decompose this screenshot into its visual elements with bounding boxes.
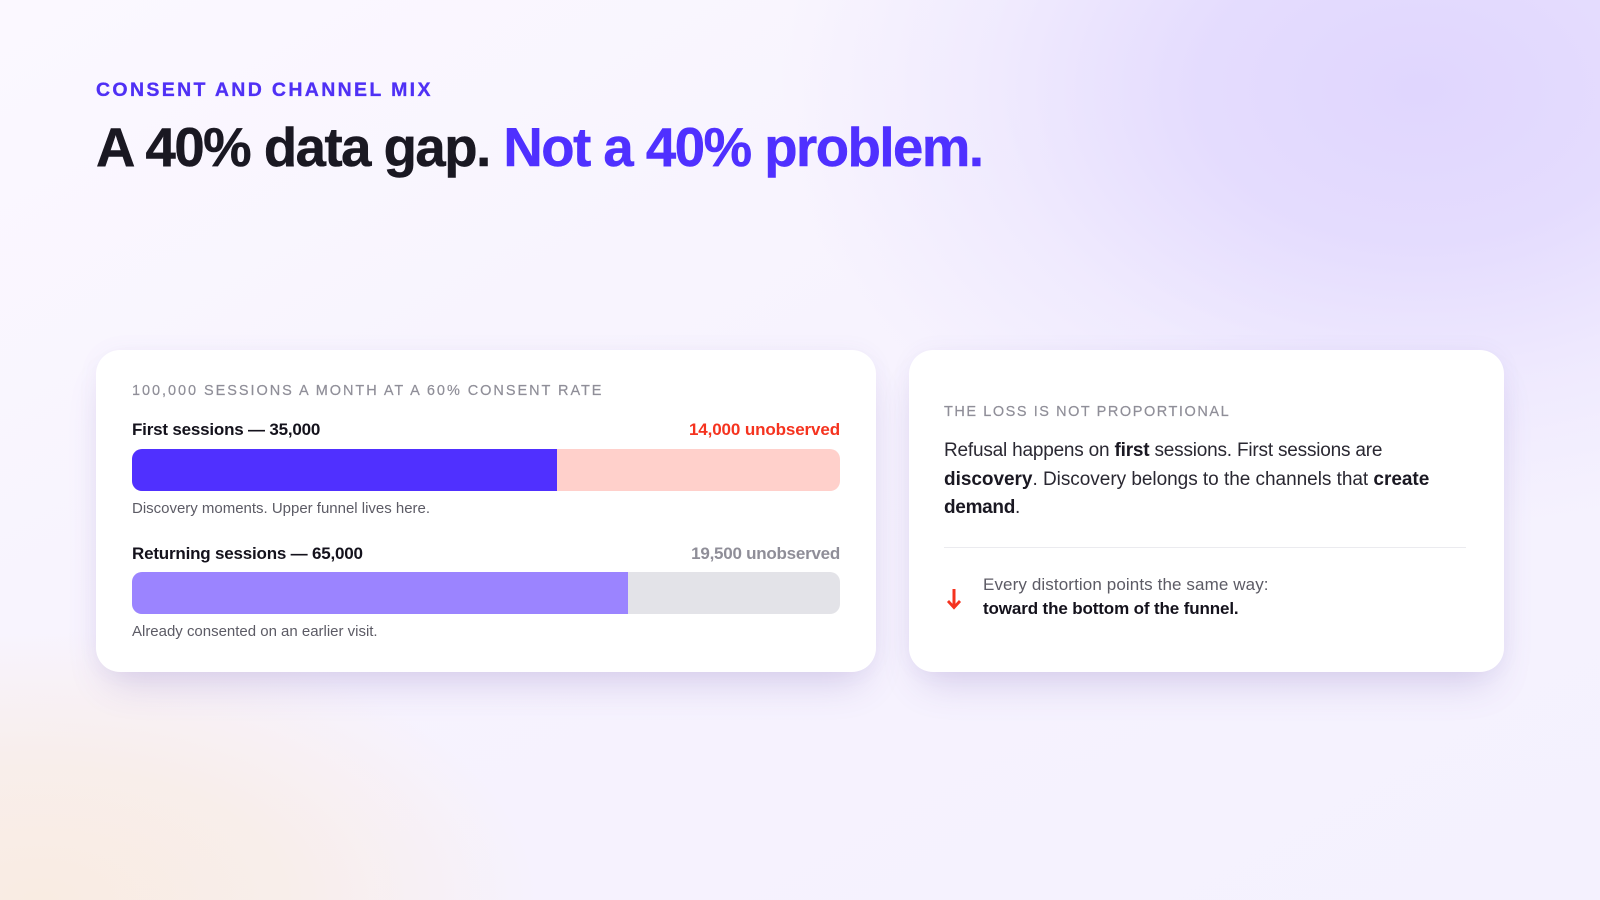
panel label: THE LOSS IS NOT PROPORTIONAL	[944, 404, 1230, 420]
callout text: toward the bottom of the funnel.	[983, 599, 1239, 618]
divider	[944, 547, 1466, 548]
explanation text: Refusal happens on first sessions. First sessions are	[944, 440, 1382, 461]
icon: down arrow	[947, 589, 961, 610]
first sessions label: First sessions — 35,000	[132, 420, 320, 439]
panel: loss explanation	[909, 350, 1504, 672]
callout text	[983, 575, 1269, 618]
panel: sessions bars	[96, 350, 876, 672]
explanation text: discovery. Discovery belongs to the channels that create	[944, 468, 1429, 490]
first sessions unobserved count: 14,000 unobserved	[689, 420, 840, 439]
eyebrow: CONSENT AND CHANNEL MIX	[96, 79, 433, 101]
title: A 40% data gap. Not a 40% problem.	[96, 117, 983, 178]
returning sessions bar	[132, 572, 840, 614]
first sessions bar	[132, 449, 840, 491]
callout text: Every distortion points the same way:	[983, 575, 1269, 594]
first sessions note: Discovery moments. Upper funnel lives here.	[132, 500, 430, 517]
returning sessions unobserved count: 19,500 unobserved	[691, 544, 840, 563]
explanation text: demand.	[944, 497, 1020, 518]
returning sessions label: Returning sessions — 65,000	[132, 544, 363, 563]
explanation text	[944, 440, 1429, 518]
panel label: 100,000 SESSIONS A MONTH AT A 60% CONSENT RATE	[132, 383, 603, 399]
returning sessions note: Already consented on an earlier visit.	[132, 623, 378, 640]
